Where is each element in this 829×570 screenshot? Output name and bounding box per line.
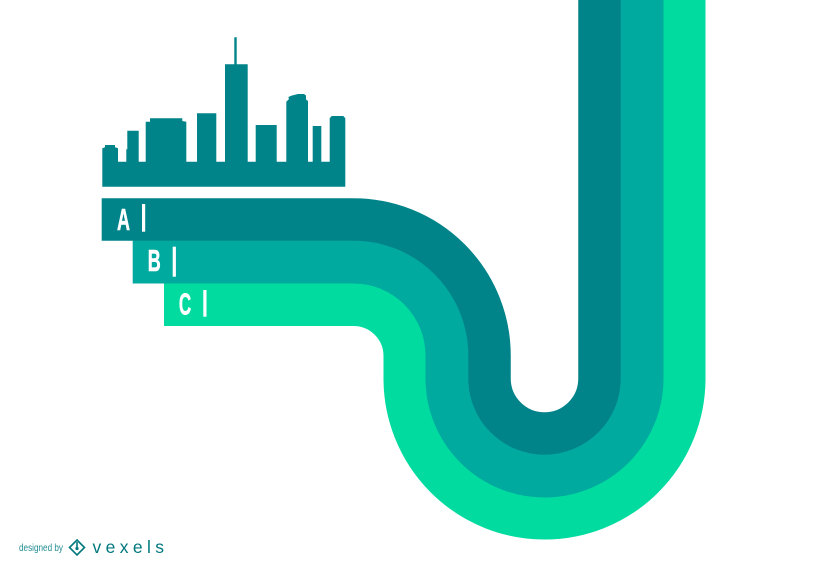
footer: designed by vexels logo — [19, 537, 164, 557]
icon: vexels diamond — [70, 540, 84, 555]
city skyline silhouette — [102, 37, 345, 187]
label A — [117, 203, 145, 237]
label C — [179, 287, 206, 322]
ribbon B — [133, 0, 642, 476]
label B — [148, 244, 176, 278]
vexels wordmark: vexels — [92, 537, 164, 557]
designed by text: designed by — [19, 543, 63, 554]
label B: B — [148, 244, 161, 278]
ribbon C — [164, 0, 684, 518]
ribbon A — [102, 0, 599, 433]
label C: C — [179, 287, 191, 322]
label A: A — [117, 203, 130, 237]
